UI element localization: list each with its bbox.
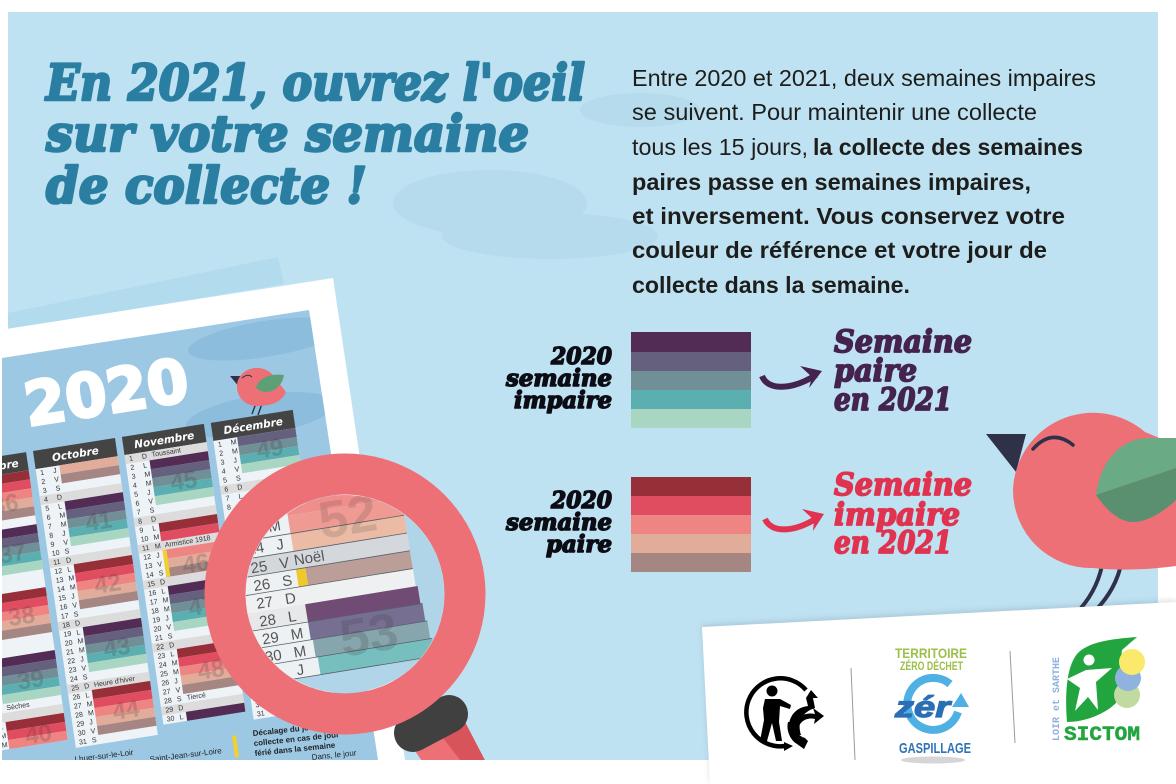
month: octobre: M bbox=[79, 647, 85, 655]
month: novembre: 9 bbox=[139, 527, 144, 535]
text block: explanation: Entre 2020 et 2021, deux semaines impaires bbox=[632, 65, 1096, 91]
month: octobre: 27 bbox=[74, 703, 82, 711]
magnified calendar view: 27 bbox=[255, 593, 274, 613]
logo: territoire zero dechet bbox=[894, 645, 971, 764]
magnified calendar view: J bbox=[275, 536, 285, 554]
month: novembre: 8 bbox=[138, 518, 143, 526]
month: novembre: 18 bbox=[151, 608, 160, 616]
result: semaine impaire en 2021: en 2021 bbox=[834, 525, 952, 561]
logo: sictom: LOIR et SARTHE bbox=[1052, 657, 1063, 741]
month: decembre: 31 bbox=[257, 710, 265, 719]
month: decembre: S bbox=[236, 475, 242, 483]
month: octobre: 23 bbox=[68, 667, 77, 675]
month: octobre: Heure d'hiver bbox=[94, 675, 136, 689]
month: novembre: Armistice 1918 bbox=[164, 535, 211, 549]
month: octobre: D bbox=[66, 557, 72, 565]
calendar page bbox=[2, 310, 378, 760]
month: octobre: 8 bbox=[49, 532, 54, 540]
month: novembre: M bbox=[153, 534, 160, 542]
magnified calendar view: M bbox=[290, 625, 305, 644]
month: octobre: Octobre bbox=[51, 445, 100, 464]
calendar: commune names bbox=[75, 748, 222, 760]
month: octobre: 4 bbox=[44, 496, 49, 504]
logo: territoire zero dechet: GASPILLAGE bbox=[899, 740, 971, 757]
magnified calendar view: S bbox=[281, 572, 294, 590]
month: octobre: S bbox=[64, 548, 70, 556]
calendar: legend for shifted collection: Décalage du jour de bbox=[252, 721, 329, 738]
month: novembre: 11 bbox=[142, 545, 150, 553]
logo: territoire zero dechet: TERRITOIRE bbox=[895, 645, 967, 661]
month: octobre: 20 bbox=[64, 640, 73, 648]
month: octobre: L bbox=[67, 566, 72, 574]
month: novembre: 25 bbox=[160, 670, 169, 679]
text block: explanation: tous les 15 jours, bbox=[632, 134, 808, 160]
label: 2020 semaine impaire bbox=[505, 343, 612, 414]
month: octobre: 11 bbox=[53, 559, 61, 567]
month: novembre: 6 bbox=[135, 500, 140, 508]
month: novembre: M bbox=[164, 606, 170, 614]
month: novembre: 7 bbox=[136, 509, 141, 517]
text block: explanation: collecte dans la semaine. bbox=[632, 272, 910, 298]
magnified calendar view: 30 bbox=[264, 647, 283, 666]
month: octobre: J bbox=[62, 530, 66, 538]
month: decembre: 6 bbox=[224, 486, 229, 494]
month: octobre: 42 bbox=[93, 569, 123, 600]
month: novembre: 24 bbox=[159, 661, 167, 670]
month: decembre: V bbox=[234, 466, 240, 474]
logo: triman bbox=[746, 678, 824, 751]
month: decembre: 3 bbox=[220, 459, 225, 467]
calendar heading: 2020: 2020 bbox=[19, 346, 193, 441]
month: octobre: 16 bbox=[59, 604, 68, 612]
month: novembre: 10 bbox=[140, 536, 149, 544]
month: octobre: 41 bbox=[84, 506, 114, 537]
title bbox=[44, 53, 585, 215]
month: novembre: S bbox=[149, 507, 155, 515]
logo: sictom bbox=[1052, 637, 1145, 747]
month: octobre: S bbox=[73, 611, 79, 619]
separator lines bbox=[851, 651, 1015, 760]
magnified calendar view: 53 bbox=[336, 602, 402, 669]
month: octobre: L bbox=[58, 503, 63, 511]
month: novembre: 47 bbox=[187, 591, 217, 622]
month: novembre: V bbox=[157, 561, 163, 569]
month: octobre: M bbox=[70, 584, 76, 592]
month: octobre: M bbox=[86, 701, 93, 709]
label: 2020 semaine paire: paire bbox=[546, 531, 612, 558]
month: octobre: 13 bbox=[55, 577, 64, 585]
magnified calendar view: 24 bbox=[246, 539, 266, 559]
calendar: commune names: Lhuer-sur-le-Loir bbox=[74, 748, 134, 764]
month: novembre: 23 bbox=[157, 652, 166, 661]
magnifying glass bbox=[214, 461, 490, 770]
month: novembre: V bbox=[166, 624, 172, 632]
month: novembre: M bbox=[162, 597, 169, 605]
month: novembre: J bbox=[156, 552, 160, 560]
result: semaine impaire en 2021: impaire bbox=[834, 497, 960, 533]
month: novembre: L bbox=[161, 588, 166, 596]
title: sur votre semaine bbox=[45, 104, 529, 163]
calendar: white sheet bbox=[0, 278, 405, 760]
logo: territoire zero dechet: ZÉRO DÉCHET bbox=[900, 658, 963, 673]
month: octobre: 9 bbox=[50, 541, 55, 549]
month: septembre: M bbox=[0, 733, 7, 741]
month: septembre: M bbox=[1, 742, 8, 750]
month: octobre: 21 bbox=[66, 649, 75, 657]
calendar: small bird bbox=[230, 368, 286, 415]
month: novembre: L bbox=[143, 462, 148, 470]
month: decembre: 30 bbox=[255, 701, 264, 710]
month: novembre: 30 bbox=[166, 715, 175, 724]
month: novembre: V bbox=[148, 498, 154, 506]
month: septembre: Sèches bbox=[6, 702, 31, 712]
magnified calendar view: 52 bbox=[315, 484, 381, 551]
calendar grid bbox=[0, 410, 336, 762]
text block: explanation: se suivent. Pour maintenir une collecte bbox=[632, 99, 1037, 125]
month: novembre: 1 bbox=[129, 455, 134, 463]
month: octobre: 30 bbox=[77, 729, 86, 738]
month: octobre: 12 bbox=[54, 568, 63, 576]
month: decembre: 8 bbox=[227, 504, 232, 512]
month: decembre: 2 bbox=[219, 450, 224, 458]
month: decembre: M bbox=[230, 439, 237, 447]
month: decembre bbox=[211, 410, 336, 720]
month: decembre: 1 bbox=[218, 441, 223, 449]
month: octobre: L bbox=[85, 692, 90, 700]
month: novembre: J bbox=[147, 489, 151, 497]
month: novembre: Toussaint bbox=[151, 447, 182, 459]
month: novembre: 48 bbox=[196, 655, 226, 686]
magnified calendar view: M bbox=[267, 517, 282, 536]
month: septembre: 38 bbox=[6, 601, 37, 632]
month: octobre: 31 bbox=[79, 738, 87, 747]
month: novembre: 26 bbox=[161, 679, 170, 688]
magnified calendar view: J bbox=[295, 661, 305, 679]
month: novembre: M bbox=[171, 660, 178, 668]
month: octobre: 19 bbox=[63, 631, 72, 639]
month: novembre: D bbox=[142, 453, 148, 461]
month: octobre: 22 bbox=[67, 658, 76, 666]
month: novembre: Novembre bbox=[134, 430, 195, 451]
magnified calendar view: 28 bbox=[258, 611, 277, 631]
month: novembre: S bbox=[167, 633, 173, 641]
month: novembre: 45 bbox=[169, 466, 199, 497]
month: octobre: 1 bbox=[40, 469, 45, 477]
magnified calendar view: M bbox=[292, 643, 307, 662]
text block: explanation: la collecte des semaines bbox=[813, 134, 1083, 160]
text block: explanation: paires passe en semaines impaires, bbox=[632, 169, 1031, 195]
panel: logos bbox=[702, 602, 1176, 784]
month: decembre: 7 bbox=[225, 495, 230, 503]
month: octobre: S bbox=[82, 674, 88, 682]
result: semaine paire en 2021: Semaine bbox=[834, 324, 972, 360]
arrow: even week bbox=[765, 509, 824, 531]
month: octobre: M bbox=[68, 575, 75, 583]
month: octobre: V bbox=[81, 665, 87, 673]
calendar: legend for shifted collection bbox=[232, 726, 356, 760]
month: decembre: 5 bbox=[223, 477, 228, 485]
month: novembre: D bbox=[151, 516, 157, 524]
logo: sictom: SICTOM bbox=[1064, 724, 1140, 747]
month: octobre: V bbox=[90, 728, 96, 736]
arrow: odd week bbox=[762, 366, 822, 388]
title: En 2021, ouvrez l'oeil bbox=[44, 53, 585, 112]
month: novembre: 14 bbox=[146, 572, 154, 580]
month: novembre: M bbox=[155, 543, 161, 551]
month: novembre: 13 bbox=[144, 563, 153, 571]
text block: explanation: et inversement. Vous conservez votre bbox=[632, 203, 1065, 229]
month: octobre: 44 bbox=[111, 695, 142, 726]
magnified calendar view: 26 bbox=[252, 576, 271, 595]
month: octobre: J bbox=[80, 656, 84, 664]
background clouds bbox=[393, 93, 700, 259]
month: novembre: D bbox=[160, 579, 166, 587]
magnified calendar view: D bbox=[284, 590, 297, 608]
month: novembre: 15 bbox=[147, 581, 156, 589]
month: octobre: L bbox=[76, 629, 81, 637]
month: decembre: 49 bbox=[255, 434, 285, 465]
month: decembre: 4 bbox=[221, 468, 226, 476]
month: octobre bbox=[33, 438, 158, 748]
month: octobre: M bbox=[60, 521, 67, 529]
month: septembre: 39 bbox=[16, 665, 46, 696]
month: octobre: D bbox=[57, 494, 63, 502]
month: octobre: 29 bbox=[76, 720, 85, 729]
month: octobre: 25 bbox=[71, 685, 80, 693]
month: octobre: 26 bbox=[72, 694, 81, 702]
month: novembre: V bbox=[175, 687, 181, 695]
month: octobre: 2 bbox=[41, 478, 46, 486]
magnifier handle bbox=[413, 714, 490, 770]
month: novembre: 12 bbox=[143, 554, 152, 562]
month: decembre: L bbox=[238, 493, 243, 501]
month: octobre: 5 bbox=[45, 505, 50, 513]
illustration: big bird bbox=[986, 413, 1176, 610]
month: novembre: Tiercé bbox=[186, 692, 206, 702]
month: novembre: 21 bbox=[155, 635, 163, 643]
month: octobre: J bbox=[53, 468, 57, 475]
magnified calendar view bbox=[246, 495, 444, 693]
month: novembre: 28 bbox=[164, 697, 172, 706]
month: octobre: S bbox=[92, 737, 97, 745]
month: octobre: S bbox=[55, 485, 61, 493]
month: octobre: 18 bbox=[62, 622, 71, 630]
result: semaine impaire en 2021: Semaine bbox=[834, 467, 972, 503]
month: octobre: M bbox=[88, 710, 95, 718]
result: semaine paire en 2021 bbox=[834, 324, 972, 418]
month: novembre: S bbox=[177, 696, 182, 704]
month: decembre: M bbox=[232, 448, 239, 456]
month: novembre: S bbox=[158, 570, 164, 578]
calendar: back sheet bbox=[8, 257, 284, 330]
month: novembre: 46 bbox=[181, 549, 211, 580]
magnified calendar view: L bbox=[287, 608, 298, 626]
calendar: legend for shifted collection: férié dans la semaine bbox=[254, 741, 336, 758]
month: octobre: 17 bbox=[61, 613, 69, 621]
month: octobre: V bbox=[72, 602, 78, 610]
month: novembre: 17 bbox=[149, 599, 158, 607]
result: semaine paire en 2021: paire bbox=[834, 353, 917, 389]
magnified calendar view: 25 bbox=[249, 558, 269, 577]
month: octobre: 7 bbox=[48, 523, 53, 531]
month: novembre: L bbox=[179, 714, 184, 722]
magnified calendar view: Noël bbox=[293, 548, 326, 569]
calendar: commune names: Saint-Jean-sur-Loire bbox=[149, 746, 223, 764]
magnified calendar view: 29 bbox=[261, 629, 280, 648]
month: novembre: 22 bbox=[156, 644, 165, 652]
text block: explanation bbox=[632, 65, 1096, 298]
month: octobre: 43 bbox=[102, 632, 132, 664]
month: octobre: D bbox=[84, 683, 90, 691]
month: septembre: 40 bbox=[23, 719, 54, 750]
month: octobre: 15 bbox=[58, 595, 67, 603]
month: novembre: 4 bbox=[133, 482, 138, 490]
label: 2020 semaine impaire: 2020 bbox=[550, 343, 612, 370]
month: novembre: L bbox=[152, 525, 157, 533]
label: 2020 semaine impaire: impaire bbox=[514, 387, 612, 414]
month: octobre: 28 bbox=[75, 711, 84, 720]
title: de collecte ! bbox=[46, 156, 367, 215]
month: octobre: J bbox=[71, 593, 75, 601]
colour swatch: odd week bbox=[631, 332, 751, 428]
month: decembre: M bbox=[240, 502, 246, 510]
month: novembre: 27 bbox=[162, 688, 171, 697]
month: octobre: 10 bbox=[51, 550, 60, 558]
month: decembre: J bbox=[233, 457, 237, 465]
month: octobre: J bbox=[89, 719, 93, 727]
month: novembre: J bbox=[165, 615, 169, 623]
month: novembre: J bbox=[174, 678, 178, 686]
month: decembre: Décembre bbox=[223, 416, 284, 437]
month: novembre: L bbox=[170, 651, 175, 659]
result: semaine paire en 2021: en 2021 bbox=[834, 382, 952, 418]
month: octobre: V bbox=[63, 539, 69, 547]
magnifier ring bbox=[225, 474, 465, 714]
label: 2020 semaine paire bbox=[505, 487, 612, 558]
calendar: legend for shifted collection: collecte en cas de jour bbox=[253, 730, 340, 748]
month: octobre: M bbox=[59, 512, 66, 520]
month: novembre: M bbox=[173, 669, 180, 677]
month: octobre: 6 bbox=[46, 514, 51, 522]
label: 2020 semaine paire: 2020 bbox=[550, 487, 612, 514]
month: novembre: D bbox=[169, 642, 175, 650]
text block: explanation: couleur de référence et votre jour de bbox=[632, 237, 1047, 263]
label: 2020 semaine impaire: semaine bbox=[505, 365, 612, 392]
month: octobre: M bbox=[77, 638, 84, 646]
month: novembre: M bbox=[144, 471, 151, 479]
month: novembre: 29 bbox=[165, 706, 174, 715]
colour swatch: even week bbox=[631, 477, 751, 572]
month: octobre: 14 bbox=[57, 586, 65, 594]
month: novembre: 3 bbox=[131, 473, 136, 481]
month: decembre: D bbox=[237, 484, 243, 492]
month: novembre: 5 bbox=[134, 491, 139, 499]
month: octobre: V bbox=[54, 476, 60, 484]
calendar: legend for shifted collection: Dans, le jour bbox=[311, 748, 357, 762]
month: novembre: D bbox=[178, 705, 184, 713]
month: octobre: D bbox=[75, 620, 81, 628]
month: septembre bbox=[0, 452, 68, 757]
month: novembre bbox=[122, 424, 245, 725]
month: novembre: 2 bbox=[130, 464, 135, 472]
month: novembre: 16 bbox=[148, 590, 157, 598]
month: novembre: 19 bbox=[152, 617, 161, 625]
month: novembre: M bbox=[145, 480, 152, 488]
magnified calendar view: V bbox=[278, 554, 291, 573]
logo: territoire zero dechet: zér bbox=[894, 691, 953, 724]
result: semaine impaire en 2021 bbox=[834, 467, 972, 561]
month: octobre: 24 bbox=[70, 676, 78, 684]
month: octobre: 3 bbox=[42, 487, 47, 495]
month: novembre: 20 bbox=[153, 626, 162, 634]
label: 2020 semaine paire: semaine bbox=[505, 509, 612, 536]
